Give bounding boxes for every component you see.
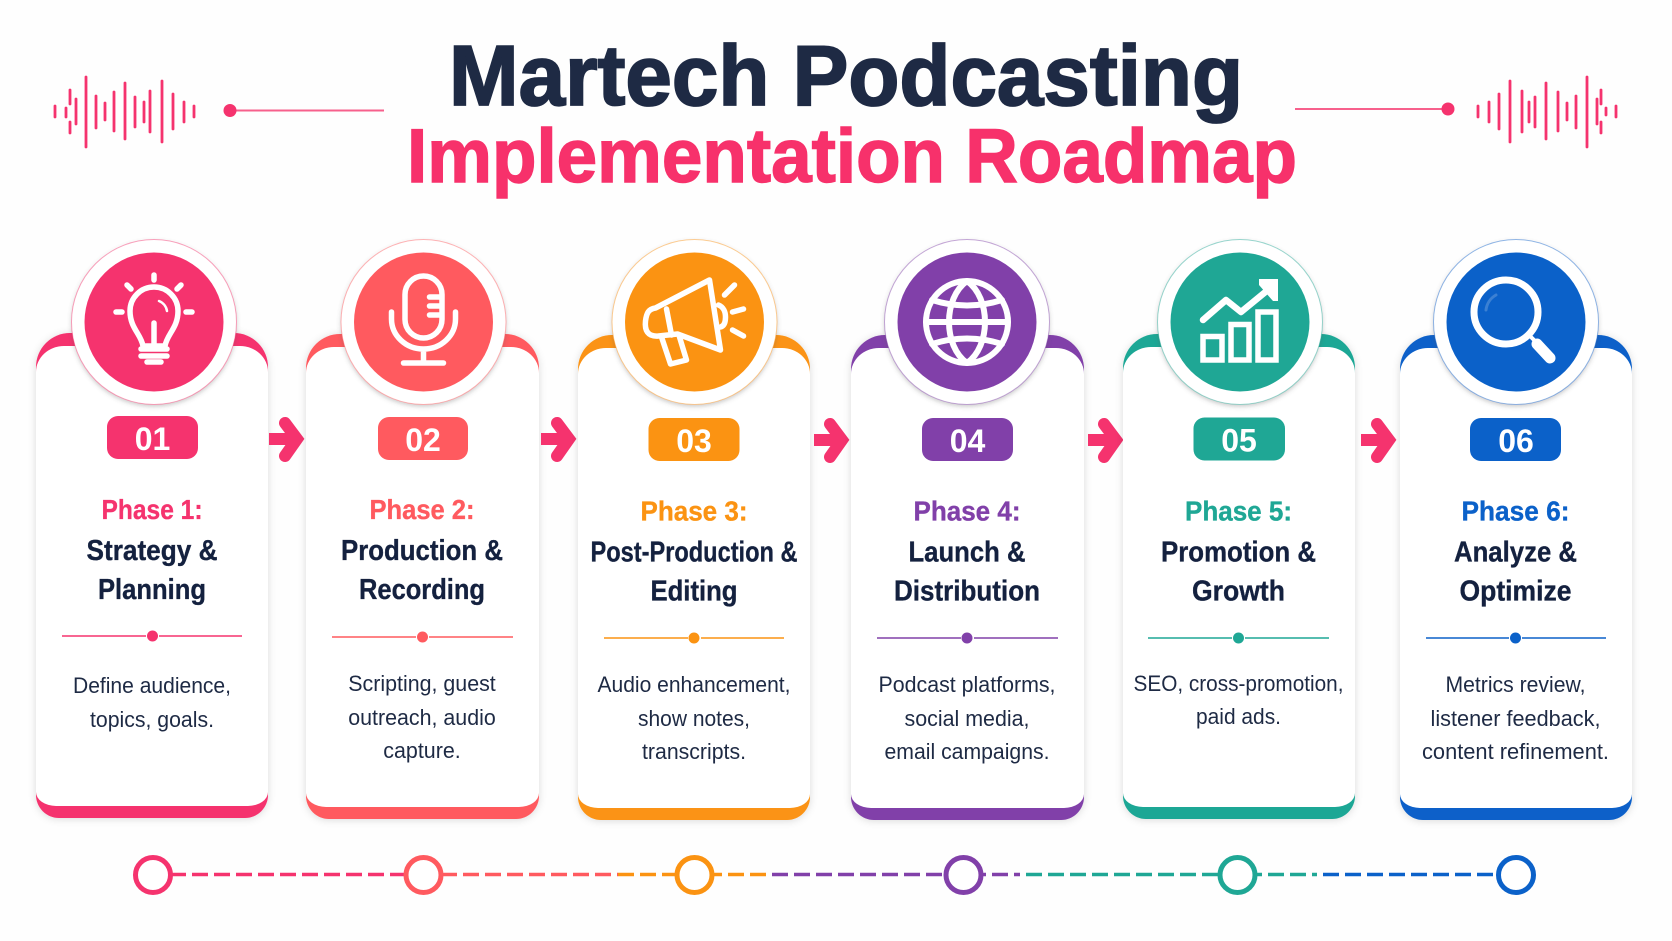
- description: Define audience,: [73, 673, 231, 698]
- right connector line: [1295, 102, 1454, 116]
- description: email campaigns.: [884, 739, 1050, 764]
- icon: light bulb: [72, 240, 236, 404]
- icon: megaphone: [612, 240, 777, 404]
- description: [348, 671, 496, 763]
- panel: phase 3: [578, 240, 810, 820]
- description: Scripting, guest: [348, 671, 496, 696]
- timeline node 2: [406, 858, 441, 892]
- right sound wave: [1478, 77, 1616, 147]
- badge 03: [648, 418, 740, 461]
- heading: strategy and planning: [86, 535, 218, 606]
- arrow 5: [1361, 424, 1389, 457]
- heading: promotion and growth: Growth: [1192, 576, 1285, 608]
- badge 02: 02: [405, 422, 441, 458]
- heading: promotion and growth: Promotion &: [1161, 536, 1316, 568]
- description: [1422, 672, 1609, 764]
- description: [1134, 671, 1344, 729]
- title: Martech Podcasting: [449, 29, 1243, 124]
- description: topics, goals.: [90, 707, 214, 732]
- icon: growth chart: [1158, 240, 1322, 404]
- timeline node 4: [946, 858, 981, 892]
- timeline connector: [170, 873, 1500, 876]
- heading: post-production and editing: Post-Production &: [590, 536, 798, 568]
- description: SEO, cross-promotion,: [1134, 671, 1344, 696]
- title: [407, 29, 1297, 199]
- divider: [1426, 632, 1606, 644]
- badge 04: 04: [950, 423, 986, 459]
- description: Metrics review,: [1446, 672, 1586, 697]
- panel: phase 5: [1123, 240, 1355, 819]
- badge 05: 05: [1221, 422, 1257, 458]
- panel: phase 2: [306, 240, 539, 819]
- heading: analyze and optimize: [1454, 536, 1577, 608]
- description: [73, 673, 231, 732]
- heading: production and recording: Production &: [341, 535, 503, 567]
- heading: phase 2: Phase 2:: [370, 494, 474, 525]
- badge 05: [1194, 418, 1285, 460]
- card 3 body: [578, 335, 810, 820]
- arrow 3: [814, 424, 842, 457]
- heading: post-production and editing: Editing: [650, 576, 738, 608]
- heading: launch and distribution: Launch &: [908, 536, 1026, 568]
- heading: launch and distribution: [894, 536, 1040, 608]
- panel: phase 1: [36, 240, 268, 818]
- badge 06: [1470, 418, 1561, 461]
- description: outreach, audio: [348, 705, 496, 730]
- timeline node 3: [677, 858, 712, 892]
- heading: strategy and planning: Planning: [98, 574, 206, 606]
- icon: globe: [884, 240, 1050, 404]
- left sound wave: [55, 77, 194, 147]
- heading: production and recording: [341, 535, 503, 606]
- description: listener feedback,: [1430, 706, 1600, 731]
- heading: analyze and optimize: Optimize: [1460, 576, 1572, 608]
- divider: [332, 632, 513, 642]
- description: Audio enhancement,: [598, 672, 790, 697]
- badge 04: [922, 418, 1013, 461]
- card 6 body: [1400, 335, 1632, 820]
- arrow 2: [541, 423, 569, 456]
- timeline node 1: [136, 858, 170, 892]
- description: show notes,: [638, 706, 750, 731]
- divider: [1148, 632, 1329, 644]
- description: transcripts.: [642, 739, 746, 764]
- card 1 body: [36, 333, 268, 818]
- left connector line: [224, 104, 384, 117]
- badge 02: [378, 417, 468, 460]
- heading: phase 1: Phase 1:: [102, 494, 202, 525]
- arrow 4: [1088, 424, 1116, 457]
- description: capture.: [383, 738, 461, 763]
- description: content refinement.: [1422, 739, 1609, 764]
- description: [878, 672, 1056, 764]
- heading: analyze and optimize: Analyze &: [1454, 536, 1577, 568]
- heading: production and recording: Recording: [359, 574, 485, 606]
- heading: phase 6: Phase 6:: [1462, 496, 1570, 526]
- heading: phase 5: Phase 5:: [1185, 496, 1292, 526]
- heading: post-production and editing: [590, 536, 798, 608]
- badge 03: 03: [676, 423, 712, 459]
- divider: [604, 632, 784, 644]
- card 2 body: [306, 334, 539, 819]
- badge 01: 01: [135, 421, 170, 457]
- description: [598, 672, 790, 764]
- heading: promotion and growth: [1161, 536, 1316, 608]
- panel: phase 4: [851, 240, 1084, 820]
- divider: [877, 632, 1058, 644]
- panel: phase 6: [1400, 240, 1632, 820]
- description: paid ads.: [1196, 704, 1281, 729]
- badge 06: 06: [1498, 423, 1534, 459]
- title: Implementation Roadmap: [407, 114, 1297, 199]
- card 5 body: [1123, 334, 1355, 819]
- heading: phase 4: Phase 4:: [914, 496, 1020, 526]
- badge 01: [107, 416, 198, 459]
- description: Podcast platforms,: [878, 672, 1056, 697]
- icon: microphone: [341, 240, 506, 404]
- heading: phase 3: Phase 3:: [640, 496, 748, 526]
- heading: launch and distribution: Distribution: [894, 576, 1040, 608]
- divider: [62, 630, 242, 642]
- description: social media,: [904, 706, 1030, 731]
- card 4 body: [851, 335, 1084, 820]
- icon: magnifying glass: [1434, 240, 1598, 404]
- heading: strategy and planning: Strategy &: [86, 535, 218, 567]
- timeline node 6: [1498, 858, 1534, 892]
- arrow 1: [269, 423, 297, 456]
- timeline node 5: [1220, 858, 1255, 892]
